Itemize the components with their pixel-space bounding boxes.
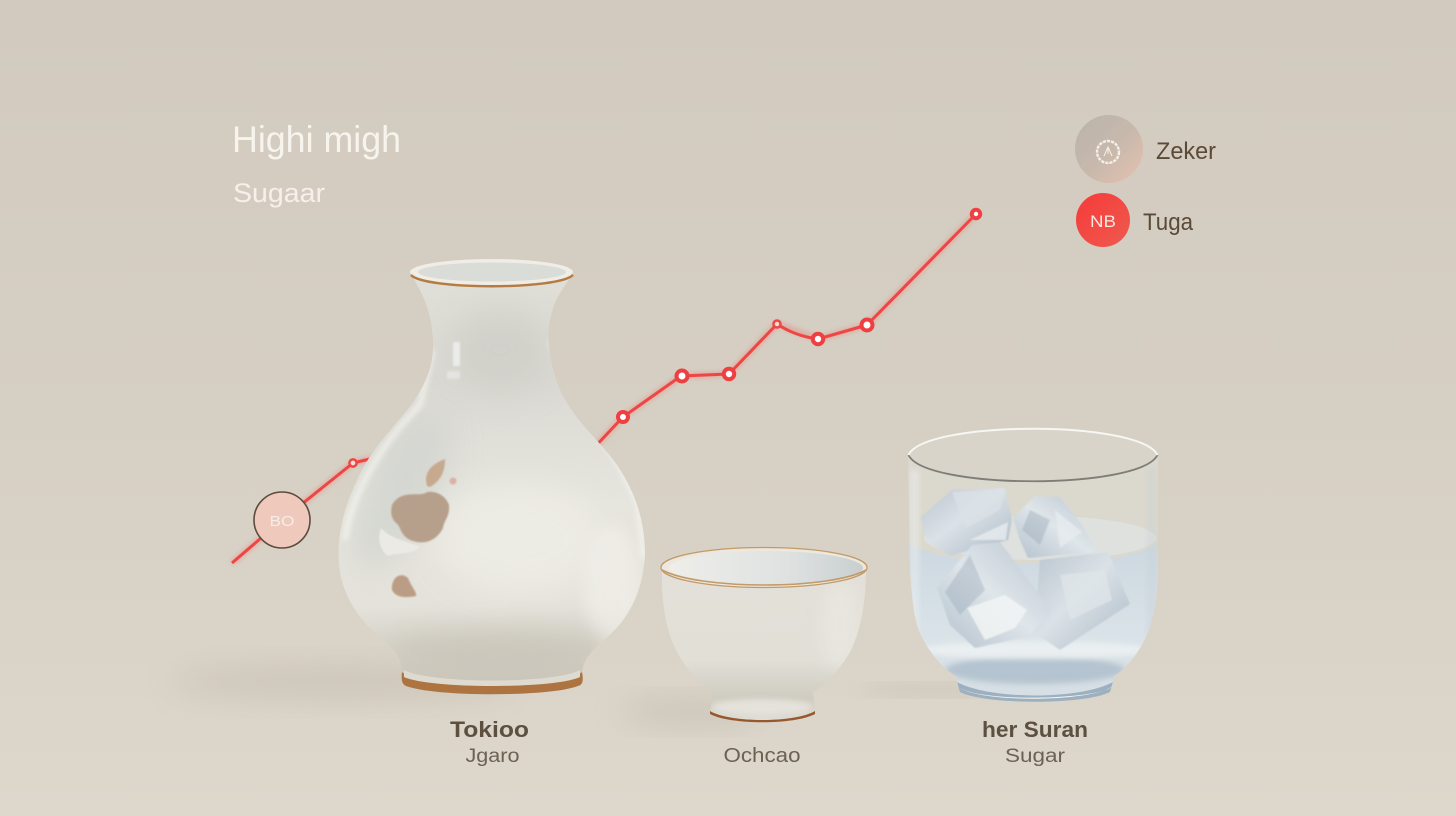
flask foot band [402, 672, 583, 694]
legend label: Tuga: Tuga [1143, 209, 1194, 236]
ice cubes [921, 488, 1130, 650]
ice cube top left [921, 488, 1012, 556]
flask body [339, 275, 645, 690]
cup mouth [661, 548, 867, 588]
flask mouth [410, 259, 573, 285]
trend line glow [232, 214, 976, 563]
back of glass interior [909, 428, 1157, 482]
data point 2 [618, 412, 628, 422]
legend label: Zeker: Zeker [1156, 138, 1216, 165]
data point 7 [862, 320, 872, 330]
water [910, 470, 1158, 696]
data point 5 [774, 320, 780, 328]
title: Highi migh [232, 119, 401, 160]
ice cube back right [1034, 552, 1130, 650]
data point 6 [813, 334, 823, 344]
ice cube front left [937, 542, 1051, 648]
sake cup [661, 548, 867, 722]
label: glass [982, 717, 1088, 767]
flask shading [331, 308, 644, 666]
data point 3 [676, 370, 688, 382]
trend line [232, 214, 976, 563]
ice cube top right [1013, 496, 1098, 558]
glass rim [908, 455, 1158, 481]
callout circle on line: BO [270, 513, 294, 530]
label: glass: her Suran [982, 717, 1088, 742]
label: glass: Sugar [1005, 746, 1066, 767]
cup liquid [669, 551, 863, 585]
subtitle: Sugaar [233, 178, 325, 208]
flask blossom decoration [379, 459, 456, 597]
cup foot rim [710, 711, 815, 722]
legend icon: Tuga: NB [1090, 212, 1116, 231]
label: cup: Ochcao [724, 745, 800, 767]
glass body [908, 455, 1158, 701]
line chart: red rising trend [232, 210, 980, 563]
glass foot [957, 682, 1113, 702]
cup body [662, 570, 866, 720]
label: flask [450, 717, 529, 767]
label: flask: Tokioo [450, 717, 529, 742]
data point 4 [724, 369, 734, 379]
legend icon: Tuga [1076, 193, 1130, 247]
label: flask: Jgaro [466, 746, 520, 767]
legend icon: Zeker [1075, 115, 1143, 183]
floor shadows [170, 668, 1000, 722]
cup shading [714, 698, 810, 714]
data point 1 [349, 459, 357, 467]
data point 8 [972, 210, 980, 218]
sake flask [331, 259, 645, 694]
callout circle on line [254, 492, 310, 548]
glass with ice water [905, 428, 1162, 720]
legend [1075, 115, 1216, 247]
